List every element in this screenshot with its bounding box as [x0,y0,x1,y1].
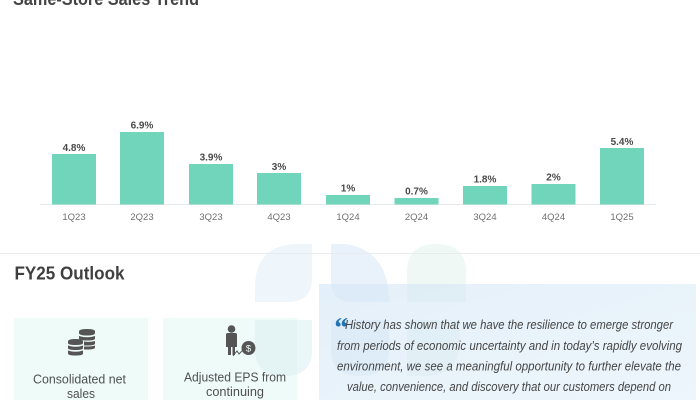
bar: 3Q23: 3Q23 [199,212,223,223]
consolidated net sales content [33,329,130,400]
adjusted EPS content [184,325,290,399]
bar: 3Q24 [463,174,507,223]
background shapes [255,244,466,376]
heading: FY25 outlook: FY25 Outlook [14,264,125,284]
bar: 1Q25: 1Q25 [610,212,634,223]
bar: 1Q25: 5.4% [611,137,634,148]
bar: 3Q24: 1.8% [474,174,497,186]
icon: coins [68,329,95,356]
bar: 4Q24 [532,172,576,223]
bar: 1Q23: 1Q23 [62,212,86,223]
bar: 1Q24: 1% [341,184,355,194]
bar chart: same-store sales [40,120,656,223]
bar: 1Q25 [600,137,644,223]
quote text [337,317,683,394]
label: consolidated net sales: Consolidated net [33,372,126,386]
bar: 4Q23 [257,162,301,223]
bar: 3Q23: 3.9% [200,152,223,164]
bar: 2Q23 [120,120,164,223]
label: adjusted EPS from continuing: continuing [206,384,264,399]
bar: 4Q24: 4Q24 [542,212,565,223]
bar: 2Q24: 0.7% [405,186,428,198]
bar: 1Q23 [52,143,96,223]
bar: 1Q24: 1Q24 [336,212,360,223]
bar: 2Q23: 2Q23 [130,212,154,223]
bar: 3Q24: 3Q24 [473,212,497,223]
bar: 1Q24 [326,184,370,223]
icon: person with dollar coin: $ [246,344,252,354]
bar: 3Q23 [189,152,233,223]
card background: consolidated net sales [14,318,148,400]
bar: 2Q24: 2Q24 [405,212,428,223]
bar: 4Q23: 4Q23 [267,212,291,223]
bar: 4Q24: 2% [546,172,561,184]
bar: 2Q23: 6.9% [131,120,154,132]
card background: adjusted EPS [163,318,297,400]
bar: 4Q23: 3% [272,162,286,173]
bar: 2Q24 [394,186,438,223]
label: adjusted EPS from continuing: Adjusted EPS from [184,370,286,384]
icon: quotation mark: “ [333,312,348,344]
bar: 1Q23: 4.8% [63,143,86,154]
panel: CEO quote [319,284,696,400]
